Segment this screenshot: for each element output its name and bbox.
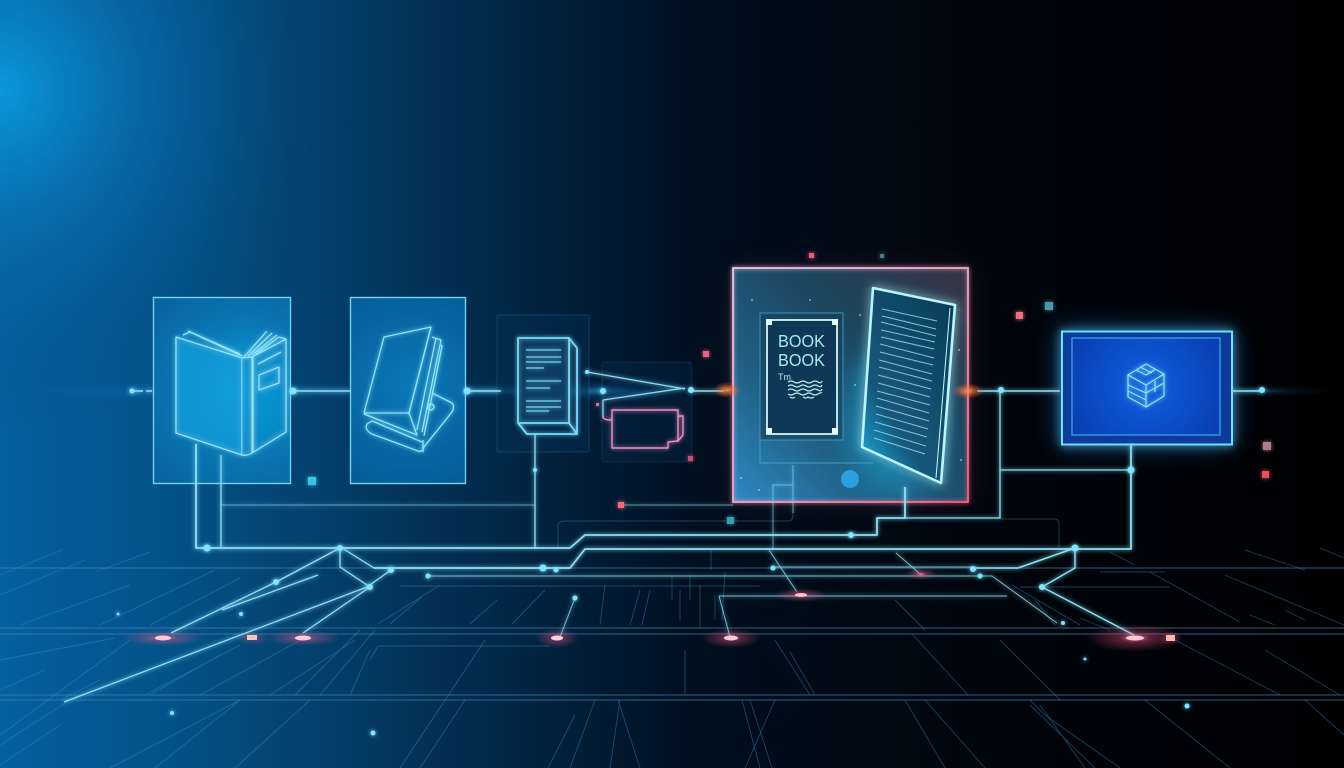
pink signal nodes [121,382,1185,652]
glowing document page [862,288,955,483]
cover title: Tm [778,372,791,382]
panel sparkles [740,299,962,491]
circuit floor grid [0,548,1344,768]
dim rounded routing frame [558,465,1059,549]
pipeline node dots [116,370,1265,736]
top bus [196,444,905,548]
cover title: BOOK [778,331,825,351]
panel: output screen [1061,331,1232,444]
horizontal light streaks [30,379,1332,403]
cover title [778,331,825,382]
arrow: converging lines [587,372,685,417]
cover title: BOOK [778,350,825,370]
icon: upright open book [176,331,286,455]
secondary risers [221,391,1131,549]
panel: open book [154,298,290,484]
icon: pink folder outline [603,410,683,448]
lower bus [374,444,1131,568]
book cover card [760,313,843,440]
main pipeline [130,390,1262,392]
icon: cube [1128,364,1164,407]
panel: transfer diagram [587,362,692,462]
panel: tilted book [350,298,466,484]
tablet frame [760,313,873,463]
panel: book conversion [733,268,968,502]
panel: document stack [497,315,589,452]
floating data squares [308,253,1271,524]
icon: document block [518,338,577,434]
floor traces [64,548,391,702]
page text lines [874,309,937,454]
connector lines [64,391,1262,702]
status dot [841,470,859,488]
icon: leaning book [364,327,454,452]
